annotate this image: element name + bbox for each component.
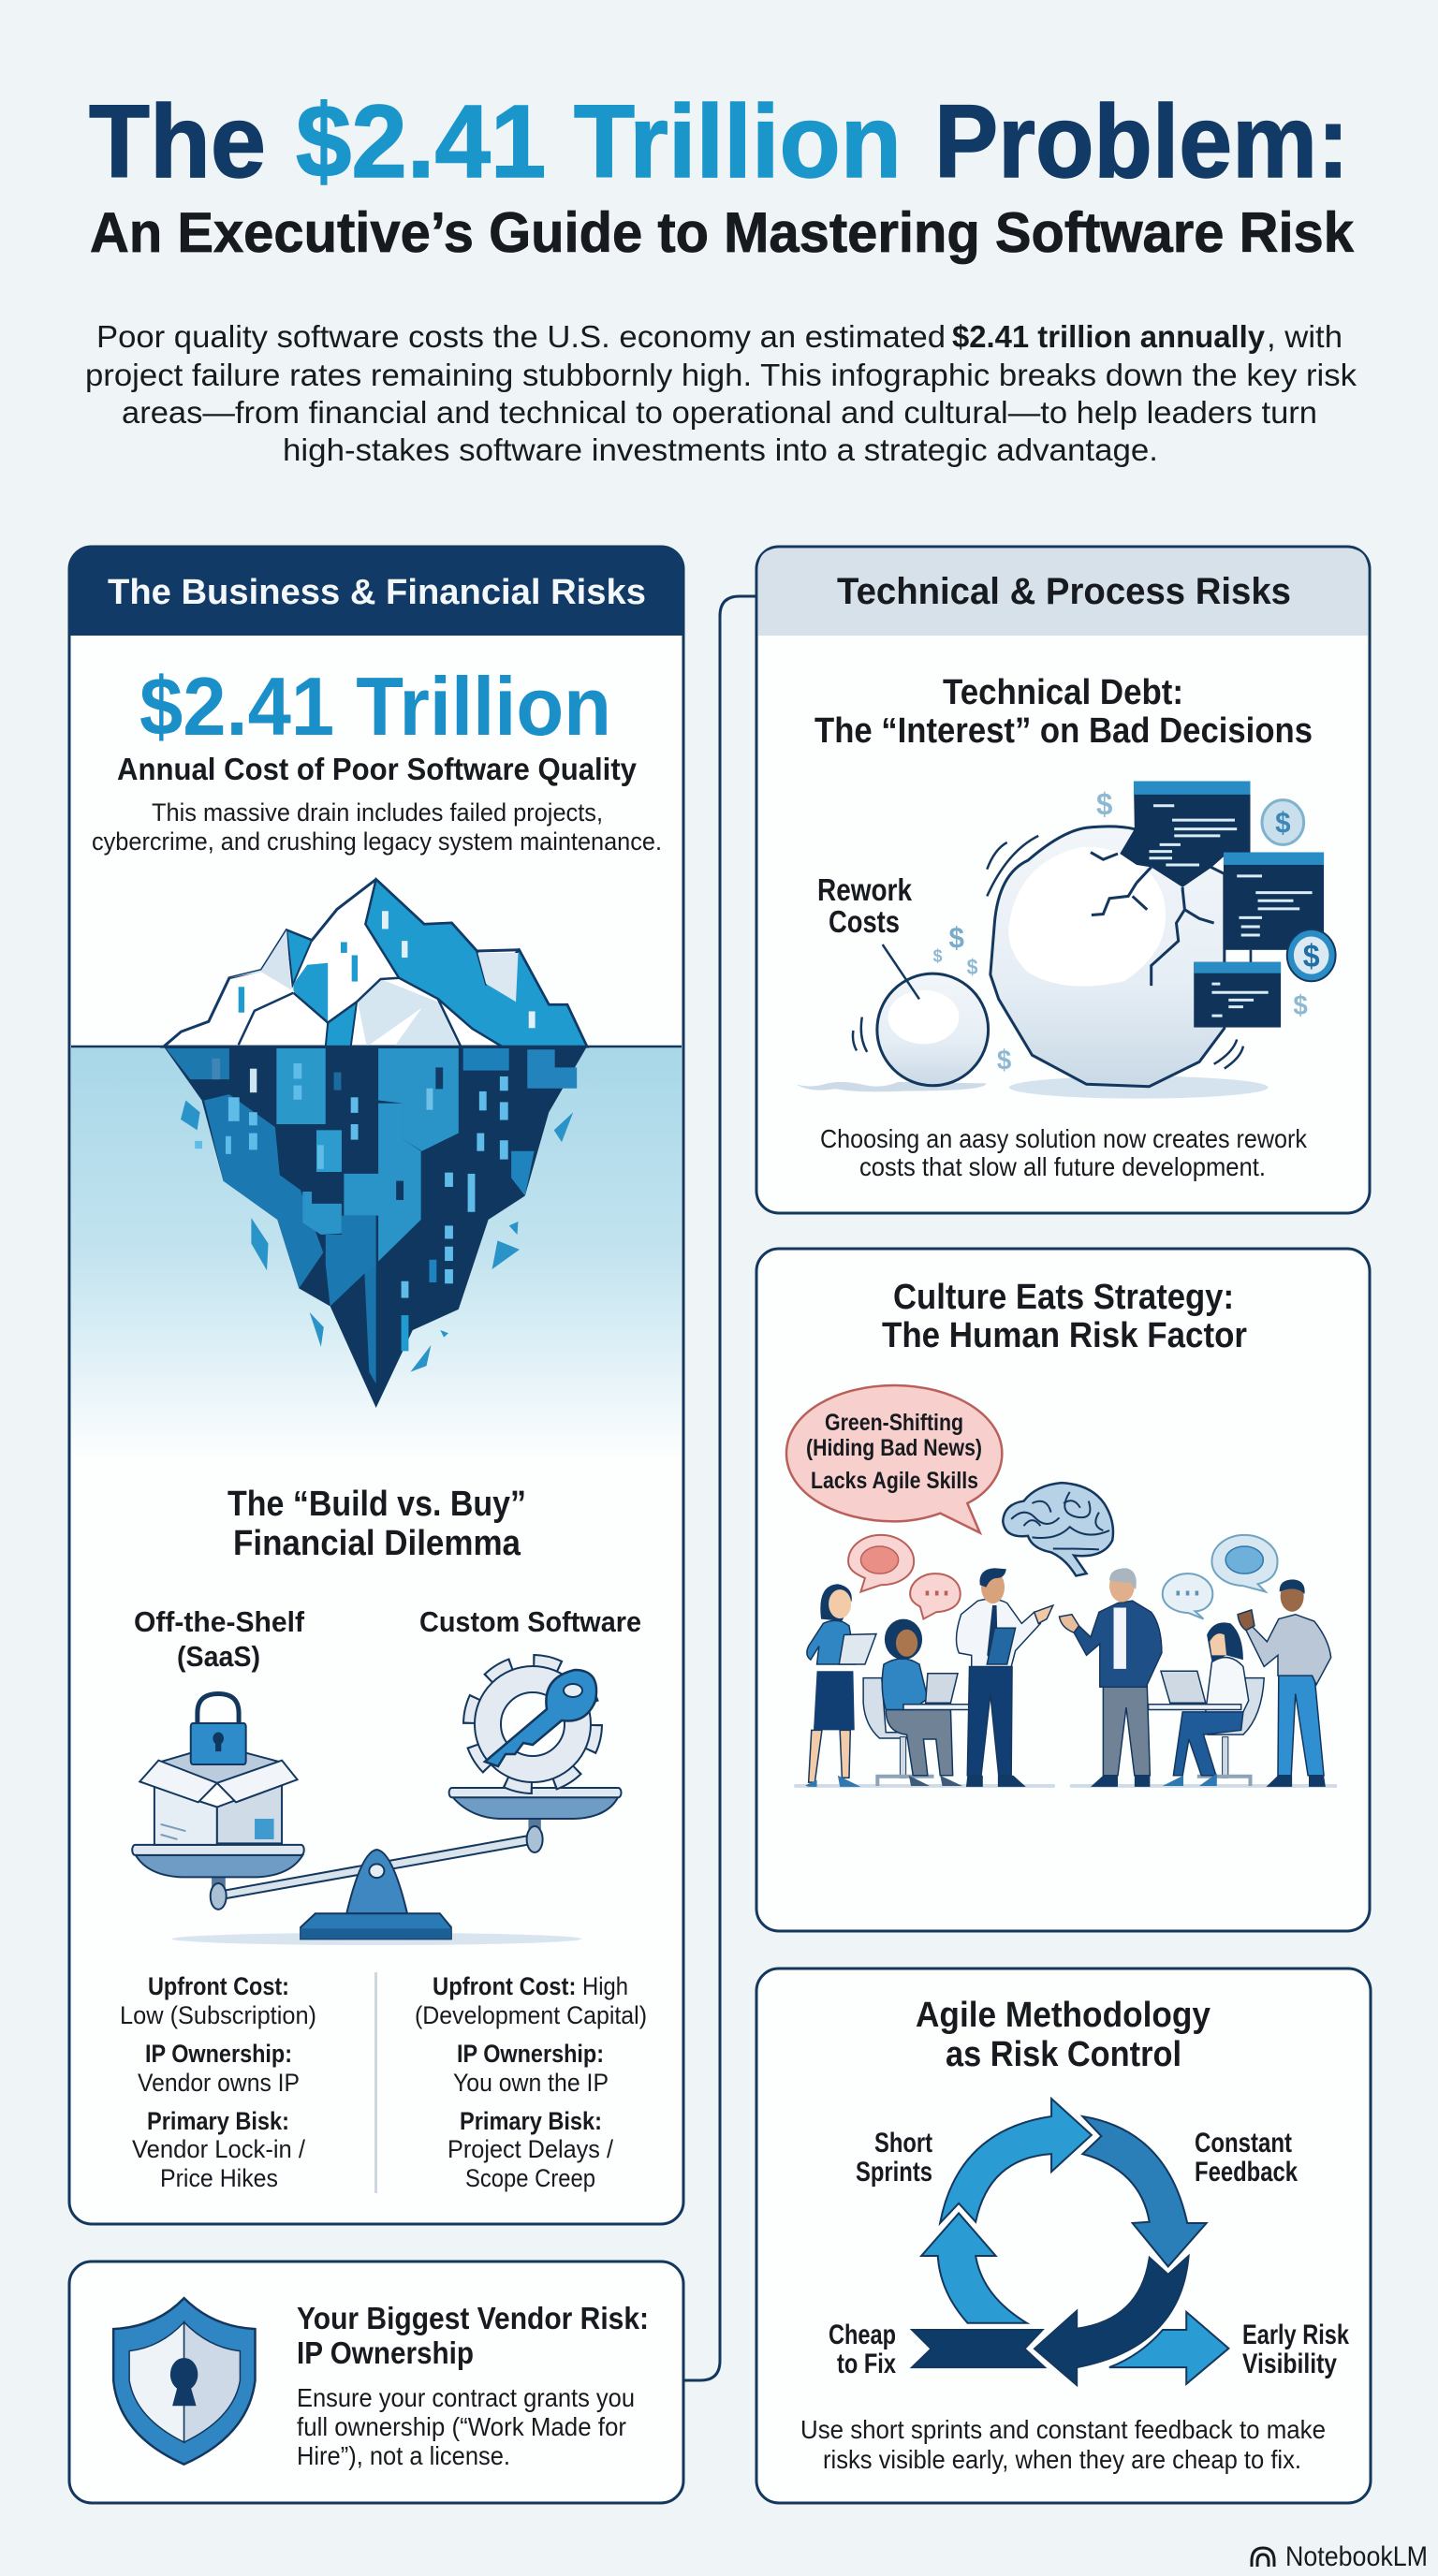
icon: gear and key (474, 1665, 596, 1783)
label: short sprints (856, 2128, 932, 2188)
icon: snowball and code windows: $ (1303, 939, 1320, 974)
intro text block: $2.41 trillion annually (952, 319, 1266, 354)
title: Problem: (934, 84, 1349, 199)
comparison table: off-the-shelf: Low (Subscription) (120, 2001, 316, 2029)
heading: technical debt: Technical Debt: (943, 673, 1183, 712)
figure: standing man with tie (956, 1568, 1053, 1787)
label: cheap to fix: Cheap (829, 2320, 896, 2350)
heading: build vs buy: Financial Dilemma (233, 1524, 521, 1563)
heading: agile methodology (916, 1996, 1211, 2074)
callout heading (297, 2301, 649, 2370)
intro text block: Poor quality software costs the U.S. economy an estimated (96, 319, 946, 354)
panel header: business and financial risks (69, 547, 683, 636)
subtitle: An Executive’s Guide to Mastering Software Risk (90, 201, 1355, 264)
stat label: Annual Cost of Poor Software Quality (117, 752, 638, 786)
icon: shield with keyhole (113, 2298, 255, 2465)
comparison table: custom software: Scope Creep (465, 2164, 595, 2192)
heading: culture eats strategy: Culture Eats Strategy: (893, 1278, 1234, 1317)
callout text (297, 2383, 635, 2470)
panel: agile methodology (756, 1969, 1371, 2503)
heading: technical debt: The “Interest” on Bad Decisions (814, 711, 1313, 751)
description: technical debt: costs that slow all future development. (859, 1152, 1266, 1181)
description: agile: risks visible early, when they are cheap to fix. (823, 2445, 1301, 2474)
comparison table: custom software: Project Delays / (448, 2135, 613, 2163)
label: constant feedback: Constant (1195, 2128, 1292, 2159)
callout bubble: warning signs (786, 1385, 1002, 1532)
label: early risk visibility: Visibility (1242, 2349, 1337, 2379)
heading: agile methodology: Agile Methodology (916, 1996, 1211, 2035)
icon: snowball and code windows: $ (1293, 990, 1308, 1021)
big number: $2.41 Trillion (139, 660, 611, 753)
comparison table: off-the-shelf: Vendor owns IP (138, 2069, 300, 2097)
heading: build vs buy (227, 1485, 526, 1563)
icon: snowball and code windows: $ (967, 955, 978, 979)
icon: snowball and code windows (796, 781, 1336, 1099)
callout text: Green-Shifting (825, 1410, 963, 1436)
figure: seated woman left (863, 1619, 970, 1786)
label: early risk visibility: Early Risk (1242, 2320, 1349, 2350)
icon: snowball and code windows: $ (1096, 786, 1112, 822)
comparison table: off-the-shelf: Upfront Cost: (148, 1972, 289, 2000)
figure: standing older man (1059, 1568, 1162, 1787)
label: early risk visibility (1242, 2320, 1349, 2379)
callout text: Hire”), not a license. (297, 2441, 510, 2470)
title (89, 84, 1349, 199)
comparison table: off-the-shelf (120, 1972, 316, 2192)
label: cheap to fix: to Fix (837, 2349, 896, 2379)
icon: balance scale (132, 1693, 622, 1945)
callout text (806, 1410, 982, 1494)
figure: standing man with hand raised (1238, 1579, 1331, 1787)
waterline (71, 1046, 682, 1047)
icon: snowball and code windows: $ (933, 945, 943, 966)
intro text block: project failure rates remaining stubbornly high. This infographic breaks down the key risk (85, 358, 1357, 392)
stat description: cybercrime, and crushing legacy system maintenance. (92, 827, 662, 856)
column label: off-the-shelf (134, 1605, 305, 1673)
panel header: technical and process risks: Technical & Process Risks (837, 571, 1291, 612)
label: short sprints: Short (874, 2128, 932, 2159)
illustration: team with speech bubbles (786, 1385, 1337, 1788)
label: short sprints: Sprints (856, 2157, 932, 2188)
comparison table: custom software: Primary Bisk: (460, 2107, 602, 2135)
panel: culture eats strategy (756, 1249, 1370, 1931)
icon: snowball and code windows: $ (1275, 807, 1291, 840)
comparison table: custom software: IP Ownership: (457, 2040, 604, 2068)
icon: snowball and code windows: $ (948, 922, 964, 955)
column label: off-the-shelf: Off-the-Shelf (134, 1605, 305, 1638)
title: The (89, 84, 266, 199)
heading: technical debt (814, 673, 1313, 751)
panel: vendor risk (69, 2261, 683, 2503)
comparison table: custom software: You own the IP (453, 2069, 609, 2097)
label: constant feedback: Feedback (1195, 2157, 1298, 2188)
comparison table: custom software: Upfront Cost: High (433, 1972, 628, 2000)
comparison table: off-the-shelf: Price Hikes (160, 2164, 278, 2192)
heading: culture eats strategy (882, 1278, 1247, 1355)
column label: custom software: Custom Software (419, 1605, 641, 1638)
label: rework costs: Rework (817, 872, 913, 907)
stat description (92, 798, 662, 856)
water (71, 1046, 682, 1458)
icon: snowball and code windows: $ (997, 1046, 1011, 1076)
icon: central brain (1003, 1483, 1113, 1576)
comparison table: off-the-shelf: Primary Bisk: (147, 2107, 289, 2135)
label: rework costs: Costs (829, 904, 900, 939)
callout text: (Hiding Bad News) (806, 1435, 982, 1461)
intro text block (85, 319, 1357, 467)
label: cheap to fix (829, 2320, 896, 2379)
panel header: technical and process risks (758, 549, 1368, 636)
description: technical debt: Choosing an aasy solution now creates rework (820, 1124, 1308, 1153)
panel: technical and process risks (756, 547, 1370, 1213)
title: $2.41 Trillion (296, 84, 902, 199)
label: rework costs (817, 872, 913, 939)
panel header: business and financial risks: The Business & Financial Risks (108, 573, 646, 612)
description: agile: Use short sprints and constant feedback to make (800, 2415, 1326, 2444)
callout text: Ensure your contract grants you (297, 2383, 635, 2412)
heading: build vs buy: The “Build vs. Buy” (227, 1485, 526, 1524)
description: agile (800, 2415, 1326, 2474)
icon: iceberg (164, 879, 587, 1408)
connector line between columns (683, 596, 756, 2380)
stat description: This massive drain includes failed projects, (152, 798, 603, 827)
figure: standing woman (805, 1584, 876, 1787)
figure: seated woman right (1149, 1622, 1264, 1786)
callout heading: IP Ownership (297, 2335, 474, 2370)
intro text block: , with (1267, 319, 1343, 354)
heading: agile methodology: as Risk Control (946, 2035, 1181, 2074)
label: constant feedback (1195, 2128, 1298, 2188)
comparison table: off-the-shelf: IP Ownership: (145, 2040, 292, 2068)
callout heading: Your Biggest Vendor Risk: (297, 2301, 649, 2335)
comparison table: custom software (415, 1972, 647, 2192)
callout text: full ownership (“Work Made for (297, 2412, 626, 2441)
comparison table: custom software: (Development Capital) (415, 2001, 647, 2029)
panel: business and financial risks (69, 547, 683, 2224)
intro text block: areas—from financial and technical to operational and cultural—to help leaders turn (122, 395, 1317, 430)
icon: agile cycle arrows (912, 2099, 1228, 2385)
callout text: Lacks Agile Skills (811, 1468, 978, 1494)
description: technical debt (820, 1124, 1308, 1181)
heading: culture eats strategy: The Human Risk Factor (882, 1316, 1247, 1355)
column label: off-the-shelf: (SaaS) (177, 1640, 260, 1673)
intro text block: high-stakes software investments into a strategic advantage. (283, 432, 1158, 467)
comparison table: off-the-shelf: Vendor Lock-in / (132, 2135, 305, 2163)
